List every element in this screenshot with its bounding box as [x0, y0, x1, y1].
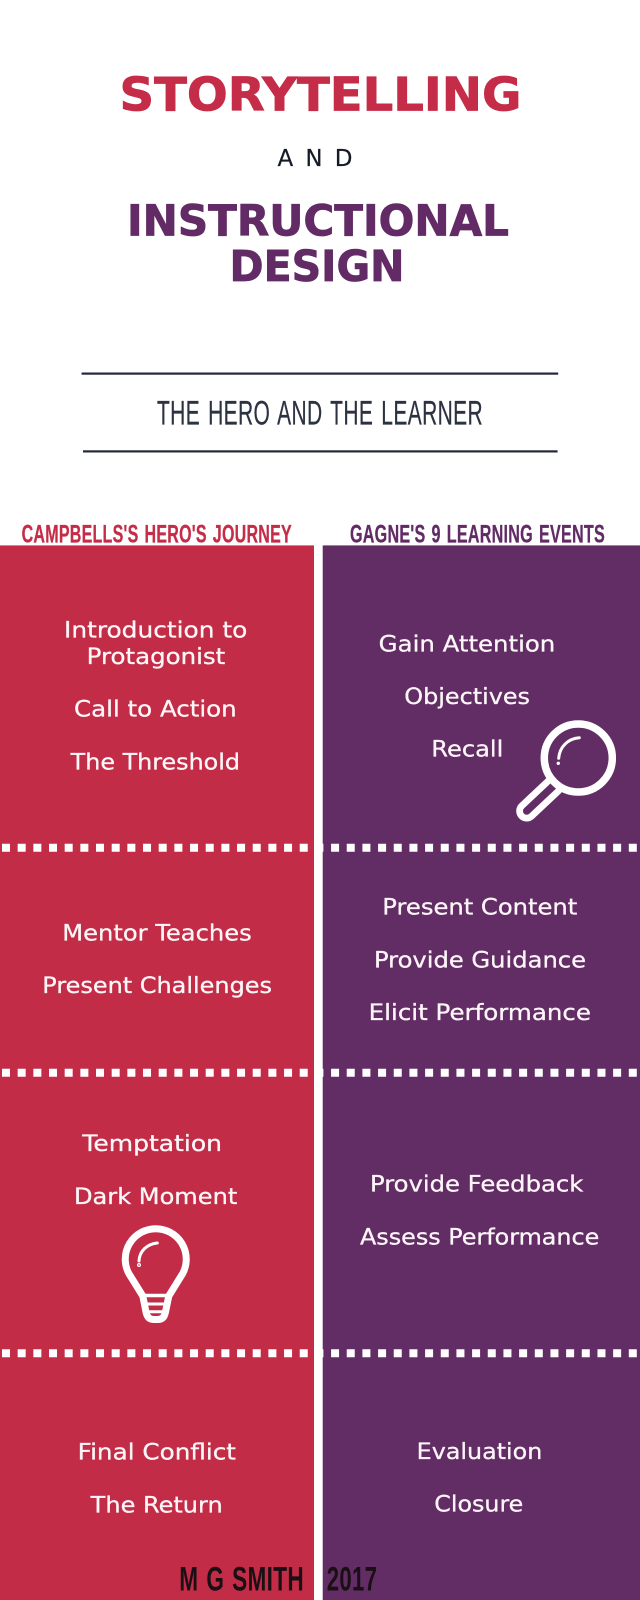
title line: design: DESIGN: [230, 242, 404, 292]
stage 1 text: [64, 618, 247, 776]
stage 2 text: Present Challenges: [42, 973, 272, 999]
stage 4 text: The Return: [90, 1492, 223, 1518]
events 1-3 text: [379, 631, 555, 763]
event 9 and closure text: Evaluation: [417, 1439, 542, 1465]
stage 1 text: Protagonist: [87, 644, 225, 670]
events 4-6 text: [369, 895, 591, 1026]
stage 3 text: [74, 1131, 237, 1210]
events 1-3 text: Gain Attention: [379, 631, 555, 657]
stage 4 text: [78, 1440, 236, 1518]
stage 1 text: Introduction to: [64, 618, 247, 644]
title line: instructional: INSTRUCTIONAL: [127, 196, 509, 246]
events 4-6 text: Elicit Performance: [369, 1000, 591, 1026]
stage 2 text: [42, 920, 272, 999]
events 1-3 text: Recall: [431, 737, 503, 763]
stage 3 text: Dark Moment: [74, 1184, 237, 1210]
panel: learning events: [323, 545, 640, 1600]
stage 1 text: The Threshold: [70, 750, 240, 776]
events 4-6 text: Provide Guidance: [374, 947, 586, 973]
title line: and: AND: [278, 146, 352, 172]
events 1-3 text: Objectives: [404, 684, 530, 710]
events 7-8 text: Provide Feedback: [370, 1172, 583, 1198]
panel: hero's journey: [0, 545, 314, 1600]
stage 4 text: Final Conflict: [78, 1440, 236, 1466]
events 4-6 text: Present Content: [382, 895, 577, 921]
stage 2 text: Mentor Teaches: [62, 920, 252, 946]
event 9 and closure text: Closure: [434, 1492, 523, 1518]
title: [120, 68, 522, 292]
stage 1 text: Call to Action: [74, 697, 237, 723]
events 7-8 text: Assess Performance: [360, 1225, 599, 1251]
title line: storytelling: STORYTELLING: [120, 68, 522, 122]
icon: magnifying glass: [527, 724, 612, 811]
event 9 and closure text: [417, 1439, 542, 1518]
credit: author: M G SMITH: [179, 1560, 304, 1598]
heading: Campbell's hero's journey: CAMPBELLS'S HERO'S JOURNEY: [22, 521, 292, 549]
stage 3 text: Temptation: [81, 1131, 222, 1157]
credit: year: 2017: [327, 1560, 377, 1598]
icon: light bulb: [125, 1229, 186, 1320]
events 7-8 text: [360, 1172, 599, 1251]
